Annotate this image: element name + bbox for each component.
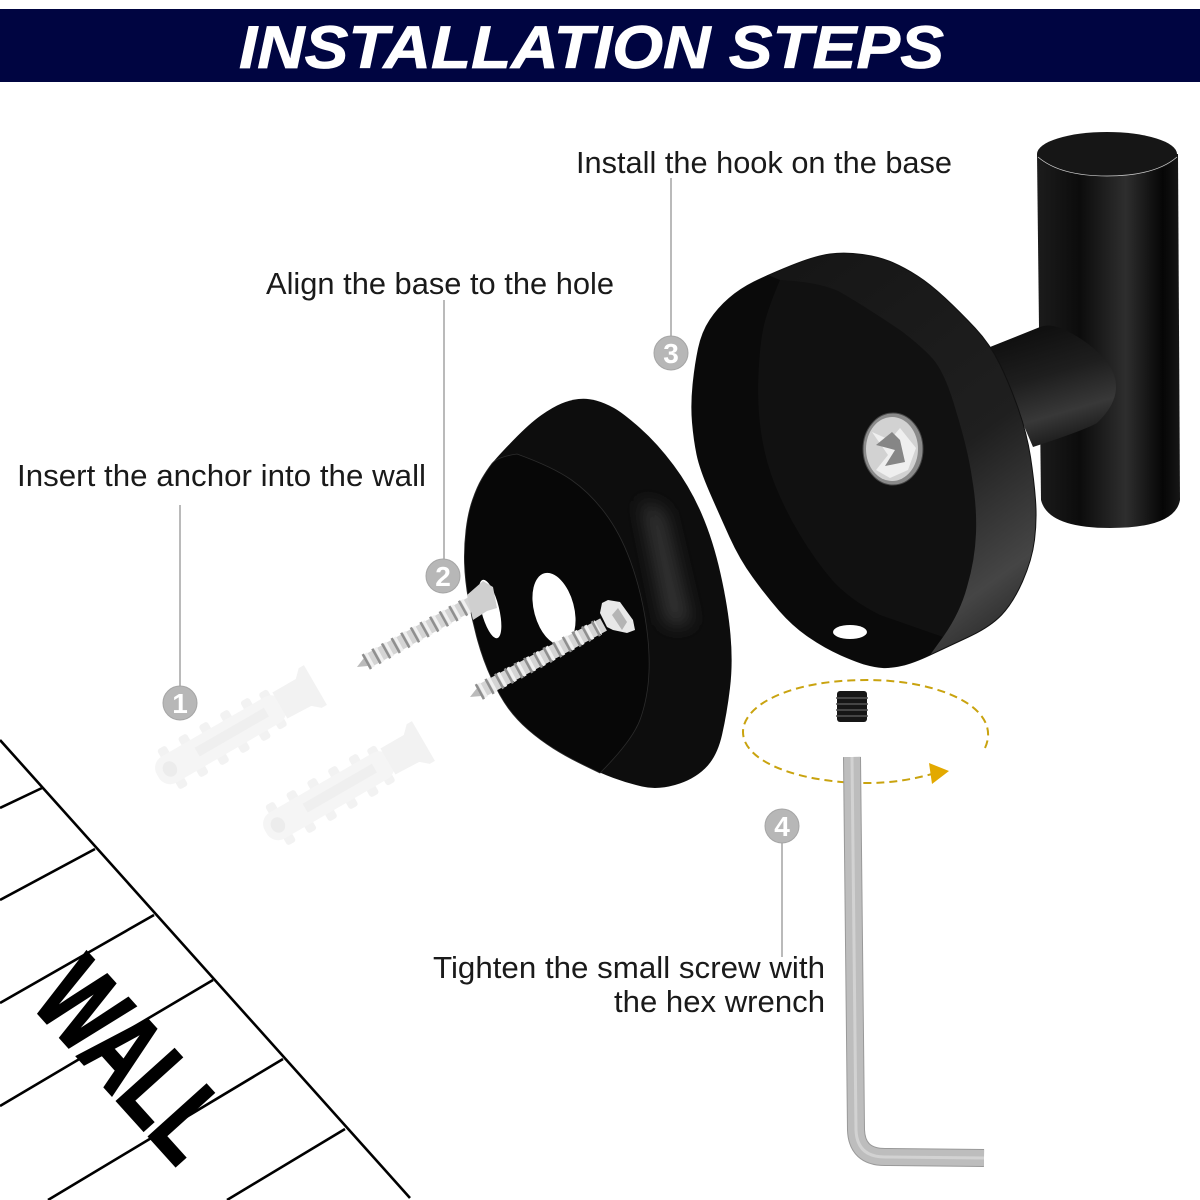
leader line and badge 4: 4 <box>774 811 790 842</box>
step 3 label: Install the hook on the base <box>576 145 952 180</box>
centre bolt <box>863 413 923 485</box>
hook upright cylinder <box>1037 132 1180 528</box>
wall anchor 2 <box>254 721 435 852</box>
step 1 label: Insert the anchor into the wall <box>17 458 426 493</box>
hook arm <box>990 326 1116 447</box>
set screw hole <box>833 625 867 639</box>
rotation arrow <box>743 680 988 784</box>
base front face <box>464 454 649 773</box>
wall label: WALL <box>11 936 252 1184</box>
screw hole left <box>474 578 506 640</box>
step 2 label: Align the base to the hole <box>266 266 614 301</box>
leader line and badge 3: 3 <box>663 338 679 369</box>
wall anchor 1 <box>146 665 327 796</box>
leader line and badge 1 <box>163 505 197 720</box>
disc inner wall <box>692 275 943 668</box>
leader line and badge 4 <box>765 809 799 957</box>
header banner <box>0 9 1200 82</box>
wall diagram <box>0 740 410 1200</box>
hex wrench <box>852 757 984 1158</box>
wall base plate <box>464 399 732 788</box>
long screw 1 <box>354 581 497 673</box>
title: INSTALLATION STEPS <box>239 14 944 81</box>
leader line and badge 2 <box>426 300 460 593</box>
leader line and badge 2: 2 <box>435 561 451 592</box>
long screw 2 <box>467 600 635 703</box>
hook disc <box>692 253 1036 668</box>
small set screw <box>836 691 868 722</box>
step 4 label: the hex wrench <box>614 984 825 1019</box>
step 4 label <box>433 950 825 1019</box>
leader line and badge 1: 1 <box>172 688 188 719</box>
screw hole centre <box>525 568 583 650</box>
step 4 label: Tighten the small screw with <box>433 950 825 985</box>
leader line and badge 3 <box>654 178 688 370</box>
disc inner face <box>758 280 976 637</box>
hook <box>692 132 1180 668</box>
